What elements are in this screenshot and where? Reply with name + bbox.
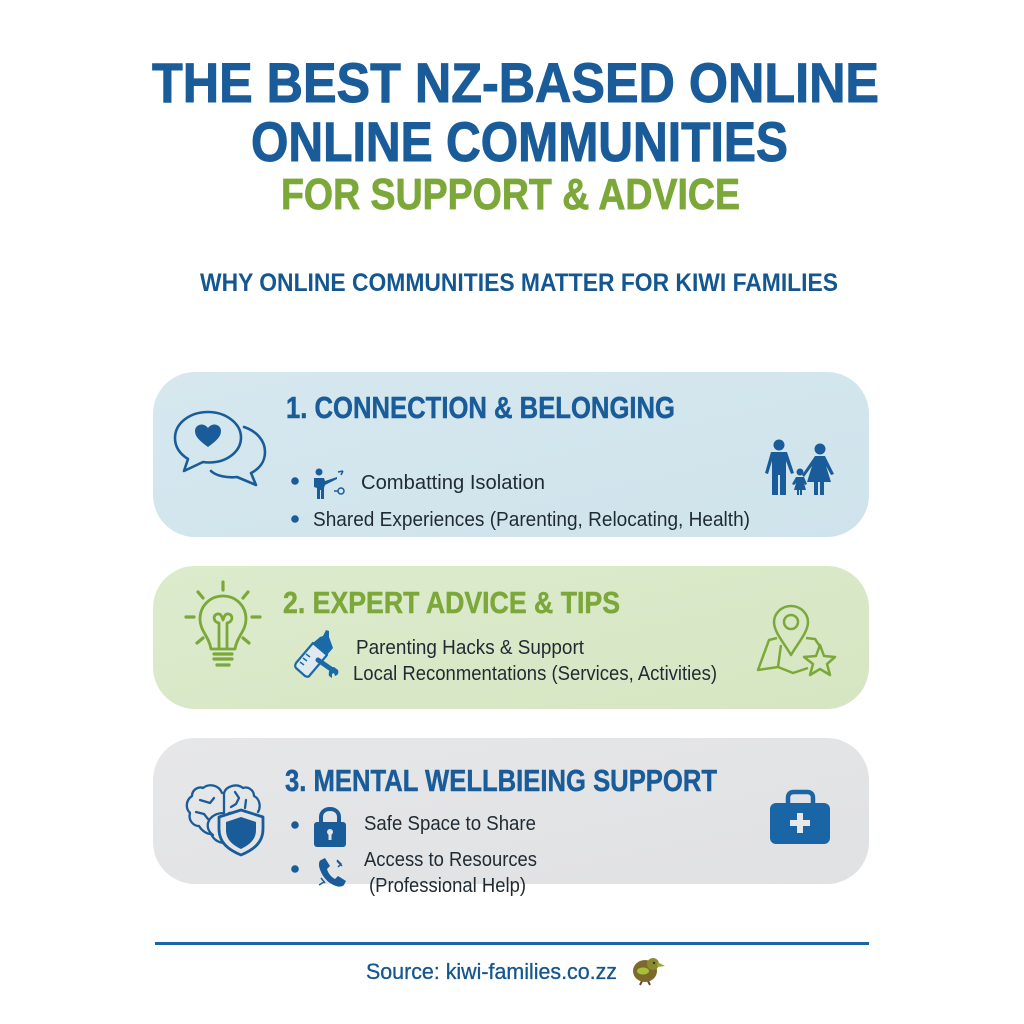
text: parenting hacks and local recommendations: Parenting Hacks & Support bbox=[356, 637, 584, 659]
bullet: combatting isolation bbox=[291, 468, 545, 499]
bullet: safe space bbox=[291, 809, 536, 847]
bullet: combatting isolation: Combatting Isolation bbox=[361, 472, 545, 494]
bullet: shared experiences: Shared Experiences (Parenting, Relocating, Health) bbox=[313, 509, 750, 531]
icon: chat bubbles with heart bbox=[175, 412, 265, 485]
icon: map pin and star bbox=[758, 606, 835, 675]
footer divider bbox=[155, 942, 869, 945]
bullet: safe space: Safe Space to Share bbox=[364, 813, 536, 835]
bullet: access to resources bbox=[291, 849, 537, 897]
text: parenting hacks and local recommendations: Local Reconmentations (Services, Activities) bbox=[353, 663, 717, 685]
panel: expert advice and tips bbox=[153, 566, 869, 709]
icon: family bbox=[765, 440, 834, 495]
subheading: WHY ONLINE COMMUNITIES MATTER FOR KIWI FAMILIES bbox=[200, 269, 838, 297]
heading: mental wellbeing: 3. MENTAL WELLBIEING SUPPORT bbox=[285, 763, 717, 798]
title bbox=[152, 51, 879, 219]
title: THE BEST NZ-BASED ONLINE bbox=[152, 51, 879, 114]
title: ONLINE COMMUNITIES bbox=[251, 110, 788, 173]
bullet: access to resources: (Professional Help) bbox=[369, 875, 526, 897]
text: parenting hacks and local recommendations bbox=[353, 637, 717, 685]
heading: connection: 1. CONNECTION & BELONGING bbox=[286, 390, 675, 425]
heading: expert advice: 2. EXPERT ADVICE & TIPS bbox=[283, 585, 620, 620]
icon: baby bottle and wrench bbox=[295, 630, 338, 678]
title: FOR SUPPORT & ADVICE bbox=[281, 170, 740, 219]
panel: mental wellbeing support bbox=[153, 738, 869, 897]
icon: brain and shield bbox=[187, 785, 263, 855]
source text: Source: kiwi-families.co.zz bbox=[366, 959, 617, 984]
bullet: access to resources: Access to Resources bbox=[364, 849, 537, 871]
panel: connection and belonging bbox=[153, 372, 869, 537]
icon: kiwi bird bbox=[633, 958, 665, 985]
icon: first aid case bbox=[770, 792, 830, 844]
icon: lightbulb bbox=[186, 582, 260, 665]
